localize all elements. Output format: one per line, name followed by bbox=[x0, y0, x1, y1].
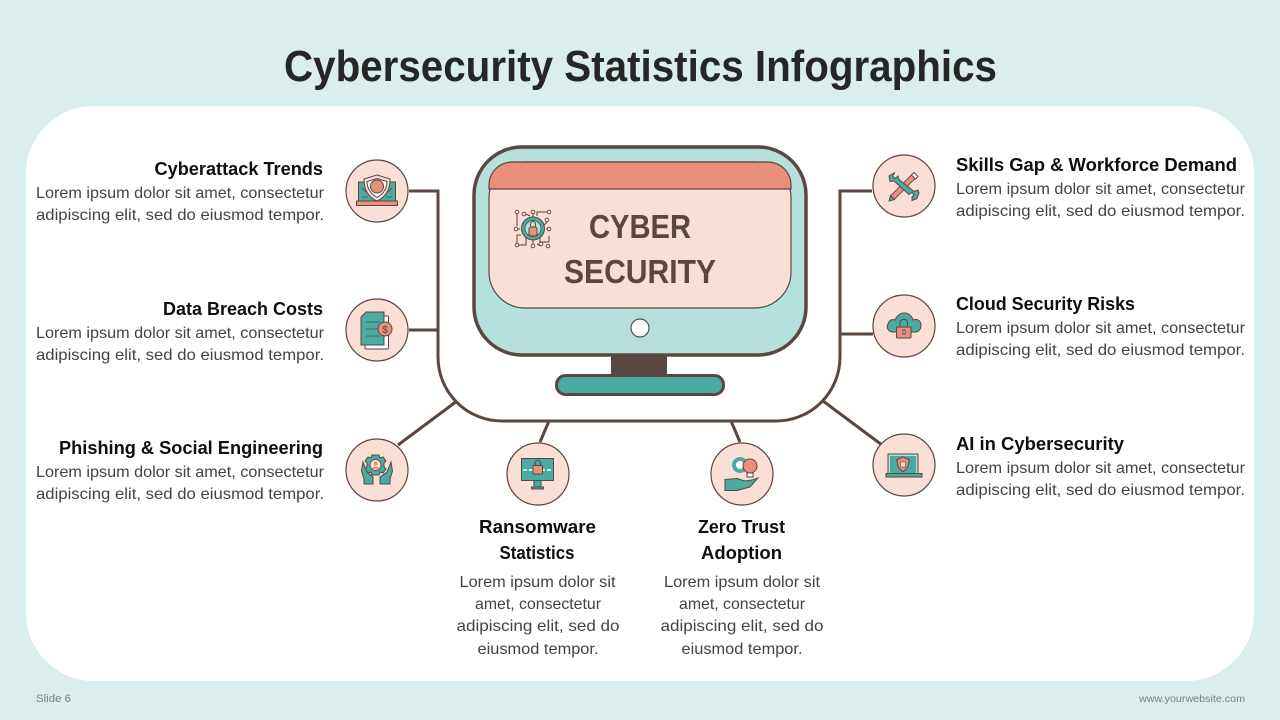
item: Data Breach Costs bbox=[36, 299, 408, 364]
body text: adipiscing elit, sed do eiusmod tempor. bbox=[956, 342, 1245, 359]
body text bbox=[956, 460, 1246, 499]
heading: Statistics bbox=[500, 543, 574, 563]
body text: adipiscing elit, sed do bbox=[660, 618, 824, 635]
icon: shield laptop bbox=[356, 175, 398, 206]
body text bbox=[456, 574, 620, 658]
heading: Ransomware bbox=[479, 517, 596, 537]
body text: Lorem ipsum dolor sit amet, consectetur bbox=[36, 185, 325, 202]
heading: Zero Trust bbox=[698, 517, 785, 537]
icon circle bbox=[346, 439, 408, 501]
body text: adipiscing elit, sed do eiusmod tempor. bbox=[956, 203, 1245, 220]
heading bbox=[479, 517, 596, 563]
body text bbox=[36, 464, 325, 503]
body text: Lorem ipsum dolor sit amet, consectetur bbox=[956, 460, 1246, 477]
icon: hands holding gear bbox=[362, 455, 392, 484]
body text: Lorem ipsum dolor sit bbox=[664, 574, 821, 591]
item: Ransomware Statistics bbox=[456, 443, 620, 658]
body text: Lorem ipsum dolor sit amet, consectetur bbox=[956, 181, 1246, 198]
body text bbox=[956, 320, 1246, 359]
icon: laptop shield bbox=[886, 454, 922, 477]
monitor body bbox=[474, 147, 806, 355]
icon: cloud padlock bbox=[887, 313, 921, 338]
icon circle bbox=[507, 443, 569, 505]
body text bbox=[660, 574, 824, 658]
monitor screen bbox=[489, 162, 791, 308]
footer: website: www.yourwebsite.com bbox=[1138, 694, 1245, 705]
icon: document with coin bbox=[361, 312, 392, 349]
title: Cybersecurity Statistics Infographics bbox=[284, 42, 997, 91]
screen heading: SECURITY bbox=[564, 253, 716, 290]
central monitor bbox=[474, 147, 806, 394]
item: AI in Cybersecurity bbox=[873, 434, 1246, 499]
monitor stand bbox=[611, 354, 667, 376]
icon circle bbox=[346, 160, 408, 222]
body text: adipiscing elit, sed do eiusmod tempor. bbox=[36, 347, 324, 364]
heading: Adoption bbox=[701, 543, 782, 563]
body text: Lorem ipsum dolor sit amet, consectetur bbox=[36, 464, 325, 481]
body text: adipiscing elit, sed do eiusmod tempor. bbox=[36, 207, 324, 224]
icon: circuit padlock bbox=[514, 210, 551, 248]
icon: monitor padlock bbox=[522, 458, 554, 489]
body text bbox=[956, 181, 1246, 220]
body text bbox=[36, 325, 325, 364]
body text: Lorem ipsum dolor sit bbox=[460, 574, 616, 591]
icon circle bbox=[873, 155, 935, 217]
heading: Phishing & Social Engineering bbox=[59, 438, 323, 458]
monitor base bbox=[556, 376, 724, 394]
monitor power button bbox=[631, 319, 649, 337]
body text: eiusmod tempor. bbox=[682, 641, 802, 658]
item: Skills Gap & Workforce Demand bbox=[873, 155, 1246, 220]
icon: hand with gear and bulb bbox=[725, 459, 758, 490]
body text: eiusmod tempor. bbox=[478, 641, 598, 658]
body text: Lorem ipsum dolor sit amet, consectetur bbox=[36, 325, 325, 342]
body text: adipiscing elit, sed do eiusmod tempor. bbox=[956, 482, 1245, 499]
heading: Data Breach Costs bbox=[163, 299, 323, 319]
item: Cyberattack Trends bbox=[36, 159, 408, 224]
item: Phishing & Social Engineering bbox=[36, 438, 408, 503]
screen heading bbox=[564, 208, 716, 290]
heading: Cyberattack Trends bbox=[154, 159, 323, 179]
item: Zero Trust Adoption bbox=[660, 443, 824, 658]
body text: adipiscing elit, sed do bbox=[456, 618, 620, 635]
connector frame bbox=[398, 191, 882, 445]
body text: amet, consectetur bbox=[475, 596, 602, 613]
icon circle bbox=[873, 434, 935, 496]
screen header band bbox=[489, 162, 791, 189]
body text bbox=[36, 185, 325, 224]
body text: Lorem ipsum dolor sit amet, consectetur bbox=[956, 320, 1246, 337]
heading: Skills Gap & Workforce Demand bbox=[956, 155, 1237, 175]
icon circle bbox=[346, 299, 408, 361]
heading bbox=[698, 517, 785, 563]
icon: document with coin: $ bbox=[382, 325, 388, 336]
icon: pencil and wrench bbox=[889, 172, 919, 201]
heading: Cloud Security Risks bbox=[956, 294, 1135, 314]
body text: adipiscing elit, sed do eiusmod tempor. bbox=[36, 486, 324, 503]
heading: AI in Cybersecurity bbox=[956, 434, 1124, 454]
icon circle bbox=[711, 443, 773, 505]
footer: slide number: Slide 6 bbox=[36, 693, 71, 705]
screen heading: CYBER bbox=[589, 208, 691, 245]
body text: amet, consectetur bbox=[679, 596, 806, 613]
main white panel bbox=[26, 106, 1254, 681]
icon circle bbox=[873, 295, 935, 357]
item: Cloud Security Risks bbox=[873, 294, 1246, 359]
